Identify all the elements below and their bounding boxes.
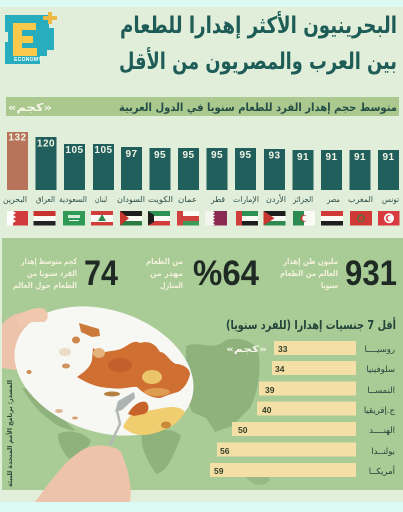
food: potato [123, 407, 185, 435]
bar chart: lowest wasting nationalities: 34 [275, 364, 285, 374]
flag: Qatar [205, 211, 227, 226]
country labels: قطر [210, 195, 225, 204]
flag: Saudi Arabia [63, 211, 85, 226]
fork [115, 392, 135, 412]
chart heading bar [6, 97, 399, 116]
flag: Egypt [321, 211, 343, 226]
bar chart: Arab countries [7, 132, 399, 190]
bar chart: Arab countries: 93 [268, 150, 281, 162]
country labels: العراق [36, 195, 55, 204]
bar chart: lowest wasting nationalities: أمريكــا [369, 465, 395, 477]
country labels: الأردن [266, 194, 286, 204]
bar chart: lowest wasting nationalities: 39 [265, 385, 275, 395]
logo: E economy [5, 12, 57, 64]
stat: 74 [13, 254, 118, 293]
flag: Tunisia [378, 211, 400, 226]
title [119, 10, 397, 75]
country labels [3, 194, 399, 205]
country labels: المغرب [348, 195, 373, 204]
bar chart: Arab countries: 91 [354, 152, 366, 163]
flag: Morocco [350, 211, 372, 226]
source note: المصدر: برنامج الأمم المتحدة للبيئة [5, 380, 14, 487]
stat: 74: الطعام حول العالم [13, 281, 77, 290]
country labels: تونس [382, 195, 399, 204]
country labels: الجزائر [292, 195, 313, 204]
flag: Kuwait [148, 211, 170, 226]
flag: Oman [177, 211, 199, 226]
stat: 931: العالم من الطعام [280, 269, 338, 278]
bar chart: lowest wasting nationalities: ج.إفريقيا [364, 406, 396, 416]
bar chart: lowest wasting nationalities: بولنــدا [371, 447, 395, 457]
bar chart: Arab countries: 105 [94, 145, 113, 156]
stat: 74: الفرد سنويا من [27, 269, 77, 278]
flag: Bahrain [7, 211, 28, 226]
chart heading bar: «كجم» [8, 101, 52, 114]
stat: 64%: من الطعام [146, 257, 183, 266]
right hand [35, 446, 131, 502]
left hand palm [2, 312, 30, 370]
bar chart: Arab countries: 132 [8, 132, 27, 144]
bar chart: Arab countries: 95 [154, 150, 166, 161]
bar chart: lowest wasting nationalities: 56 [220, 446, 230, 456]
left thumb [16, 308, 48, 328]
illustration: hand holding plate with leftover food [0, 285, 210, 502]
bar chart: Arab countries: 105 [65, 145, 84, 156]
food: rice mass [77, 342, 190, 398]
stat: 931: سنويا [321, 281, 338, 290]
bar chart: lowest wasting nationalities: النمســا [367, 386, 395, 396]
bar chart: lowest wasting nationalities: 40 [262, 405, 272, 415]
panel: green statistics and lower section [2, 238, 403, 490]
bar chart: Arab countries: 91 [382, 152, 395, 163]
food: crumbs [79, 323, 100, 337]
bar chart: Arab countries: 95 [239, 150, 252, 161]
flag: Iraq [34, 211, 56, 226]
bar chart: lowest wasting nationalities [210, 341, 396, 477]
country labels: السودان [117, 195, 145, 204]
stat: 931: مليون طن إهدار [282, 257, 338, 266]
bar chart: Arab countries: 95 [211, 150, 223, 161]
lower chart heading: «كجم» [226, 345, 267, 355]
stat: 931 [280, 254, 397, 293]
bar chart: Arab countries: 97 [125, 149, 138, 160]
stat: 74: كجم متوسط إهدار [20, 257, 77, 266]
stat: 64% [146, 254, 259, 293]
flag: Algeria [293, 211, 315, 226]
bar chart: Arab countries: 120 [37, 138, 55, 150]
flags row [7, 211, 400, 226]
food: light patches [142, 370, 162, 384]
bar chart: Arab countries: 91 [325, 152, 338, 163]
bar chart: lowest wasting nationalities: الهنــــد [369, 426, 395, 436]
stat: 64%: المنازل [160, 281, 183, 290]
logo: E economy: ECONOMY [14, 57, 42, 63]
stat: 64%: مهدر من [150, 269, 183, 278]
bar chart: lowest wasting nationalities: سلوفينيا [366, 365, 395, 375]
world map backdrop [22, 339, 270, 485]
country labels: الكويت [148, 195, 173, 204]
bar chart: lowest wasting nationalities: 33 [278, 344, 288, 354]
stat: 931: 931 [345, 254, 397, 293]
lower chart heading: أقل 7 جنسيات إهدارا (للفرد سنويا) [226, 317, 396, 333]
bar chart: lowest wasting nationalities: روسيــــا [365, 345, 395, 355]
bar chart: Arab countries: 91 [297, 152, 309, 163]
flag: Jordan [264, 211, 286, 226]
stat: 64%: %64 [193, 254, 259, 293]
bar chart: lowest wasting nationalities: 59 [214, 466, 224, 476]
bar chart: Arab countries: 95 [182, 150, 195, 161]
flag: UAE [236, 211, 258, 226]
country labels: لبنان [95, 195, 107, 204]
flag: Sudan [120, 211, 142, 226]
country labels: عمان [178, 195, 197, 204]
plate [0, 285, 210, 457]
lower chart heading [226, 317, 396, 355]
flag: Lebanon [91, 211, 113, 226]
stat: 74: 74 [84, 254, 118, 293]
country labels: مصر [326, 195, 340, 204]
bar chart: lowest wasting nationalities: 50 [238, 425, 248, 435]
country labels: السعودية [59, 195, 87, 204]
country labels: البحرين [3, 195, 27, 204]
country labels: الإمارات [233, 195, 259, 205]
